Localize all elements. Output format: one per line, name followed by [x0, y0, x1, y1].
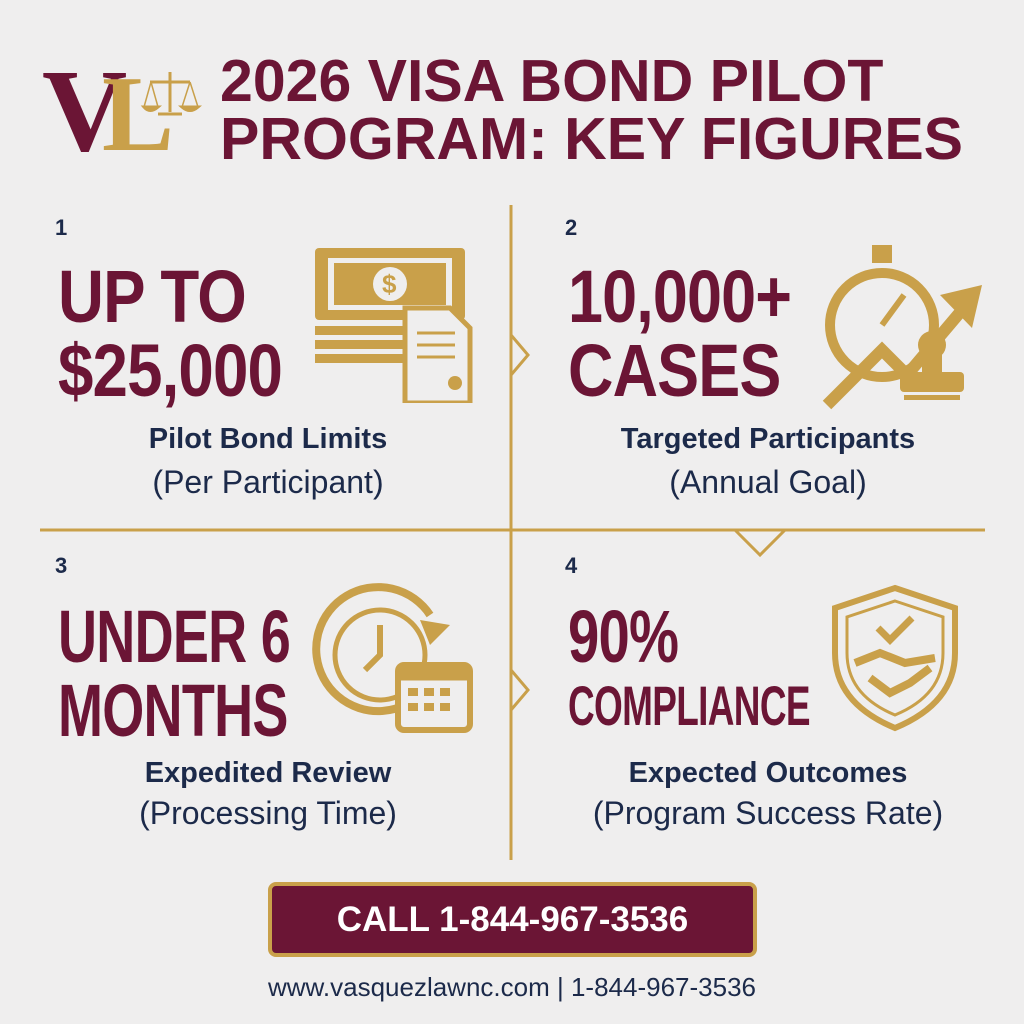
stat 2 — [568, 255, 791, 412]
panel 1: (Per Participant) — [152, 464, 384, 500]
label 2: Targeted Participants — [621, 423, 915, 455]
stat 4: 90% — [568, 595, 678, 678]
panel 2 — [565, 215, 982, 500]
stat 1 — [58, 255, 282, 412]
title: 2026 VISA BOND PILOT — [220, 48, 883, 114]
stat 3: UNDER 6 — [58, 595, 290, 678]
icon: money and document: $ — [382, 269, 397, 299]
panel 4: (Program Success Rate) — [593, 795, 943, 831]
stat 3 — [58, 595, 290, 752]
panel 4 — [565, 553, 958, 831]
panel 3 — [55, 553, 473, 831]
CTA button: CALL 1-844-967-3536 — [337, 900, 688, 939]
footer: www.vasquezlawnc.com | 1-844-967-3536 — [268, 972, 756, 1002]
panel 3: (Processing Time) — [139, 795, 397, 831]
stat 1: UP TO — [58, 255, 246, 338]
title — [220, 48, 963, 172]
icon: clock calendar — [312, 583, 473, 733]
icon: shield handshake — [832, 584, 958, 732]
stat 2: 10,000+ — [568, 255, 791, 338]
label 4: Expected Outcomes — [629, 757, 907, 789]
label 1: Pilot Bond Limits — [149, 423, 387, 455]
stat 1: $25,000 — [58, 329, 282, 412]
panel 2: 2 — [565, 215, 577, 240]
CTA button — [268, 882, 757, 957]
panel 3: 3 — [55, 553, 67, 578]
panel 4: COMPLIANCE — [568, 674, 810, 737]
icon: stopwatch growth — [822, 245, 982, 410]
title: PROGRAM: KEY FIGURES — [220, 106, 963, 172]
panel 1 — [55, 215, 472, 500]
icon: money and document — [315, 248, 472, 403]
stat 3: MONTHS — [58, 669, 288, 752]
panel 2: (Annual Goal) — [669, 464, 867, 500]
panel 1: 1 — [55, 215, 67, 240]
panel 4: 4 — [565, 553, 577, 578]
logo — [42, 52, 202, 157]
label 3: Expedited Review — [145, 757, 391, 789]
stat 2: CASES — [568, 329, 780, 412]
